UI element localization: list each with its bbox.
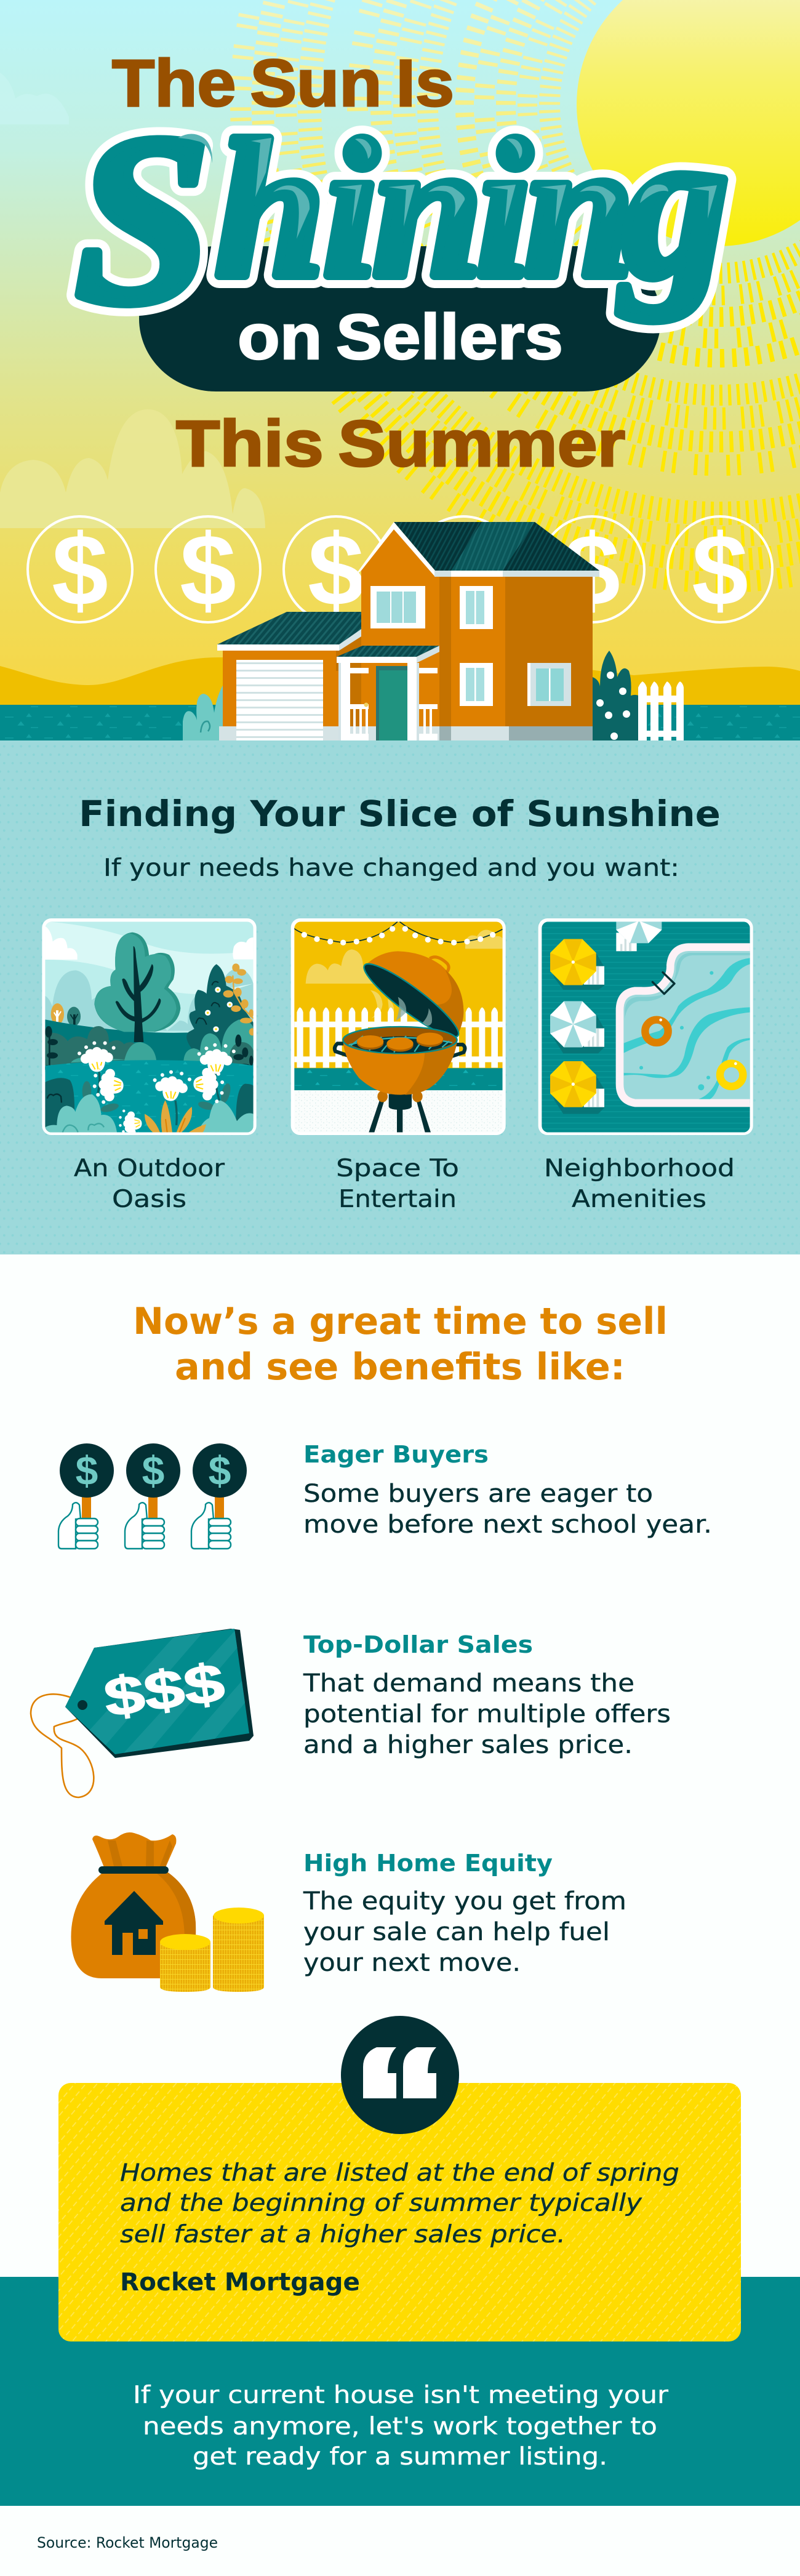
sun xyxy=(577,0,800,246)
waves xyxy=(624,958,750,1099)
house xyxy=(183,522,684,740)
title: Shining: g xyxy=(616,86,729,321)
card labels: Amenities xyxy=(572,1186,706,1213)
title: Shining: i xyxy=(323,100,378,318)
main body xyxy=(361,569,439,726)
quote attribution: Rocket Mortgage xyxy=(120,2268,360,2297)
title: Shining: n xyxy=(524,100,634,318)
dollar coins: $ xyxy=(435,513,492,627)
title: Shining: i xyxy=(476,100,532,318)
smoke xyxy=(370,990,394,1018)
porch rails and columns xyxy=(338,663,438,740)
text: top-dollar sales: potential for multiple offers xyxy=(303,1700,671,1728)
text: high home equity: The equity you get from xyxy=(303,1887,626,1916)
highlights xyxy=(178,134,717,239)
sky background xyxy=(0,0,800,740)
card: neighborhood amenities xyxy=(538,918,754,1135)
water strip xyxy=(0,705,800,740)
panel: closing band xyxy=(0,2277,800,2506)
text: top-dollar sales: That demand means the xyxy=(303,1669,634,1698)
heading: benefits xyxy=(133,1300,668,1389)
text: high home equity xyxy=(303,1850,626,1977)
small trees xyxy=(51,1003,64,1025)
flowers xyxy=(78,1041,116,1072)
title: Shining: h xyxy=(215,100,325,318)
water xyxy=(294,1068,503,1090)
card labels: An Outdoor xyxy=(74,1155,225,1182)
card labels xyxy=(74,1155,735,1213)
fence xyxy=(638,681,684,740)
title: This Summer: This Summer xyxy=(176,407,625,480)
text: eager buyers: move before next school year. xyxy=(303,1511,712,1539)
card labels: Entertain xyxy=(338,1186,457,1213)
heading: Finding Your Slice of Sunshine xyxy=(79,793,721,835)
lid handle xyxy=(430,957,449,972)
dollar coins: $ xyxy=(52,513,108,627)
text: eager buyers: Eager Buyers xyxy=(303,1441,489,1468)
title: Shining: h xyxy=(215,100,325,318)
ladder xyxy=(652,973,674,994)
water xyxy=(45,1060,254,1133)
icon: price tag: $$$ xyxy=(100,1651,228,1728)
card labels: Neighborhood xyxy=(544,1155,735,1182)
heading: benefits: Now’s a great time to sell xyxy=(133,1300,668,1343)
text: high home equity: your sale can help fuel xyxy=(303,1918,610,1946)
hills xyxy=(0,657,800,705)
title: Shining: n xyxy=(373,100,482,318)
orange leaves xyxy=(145,1100,206,1133)
title: Shining: S xyxy=(75,85,210,354)
dark bush xyxy=(186,964,254,1059)
grill handles xyxy=(335,1043,465,1056)
steam on lid xyxy=(396,997,432,1025)
swim rings xyxy=(645,1020,668,1043)
fence xyxy=(294,1007,503,1068)
dollar coins: $ xyxy=(564,513,620,627)
source: Source: Rocket Mortgage xyxy=(37,2534,218,2551)
sun rays xyxy=(241,0,800,582)
garage xyxy=(223,650,361,727)
bowl xyxy=(343,1040,457,1095)
dollar coins: $ xyxy=(308,513,364,627)
dollar coins xyxy=(28,513,772,627)
card labels: Oasis xyxy=(112,1186,186,1213)
title: Shining: S xyxy=(75,85,210,354)
flower stems xyxy=(97,1072,220,1125)
title: Shining: i xyxy=(476,100,532,318)
text: top-dollar sales: and a higher sales price. xyxy=(303,1731,633,1759)
closing text xyxy=(133,2381,669,2471)
ground xyxy=(45,1019,254,1072)
small faint cloud xyxy=(0,73,69,124)
closing text: needs anymore, let's work together to xyxy=(143,2413,657,2441)
callout: quote xyxy=(58,2016,741,2341)
dollar coins: $ xyxy=(180,513,236,627)
foundation xyxy=(361,726,439,740)
door xyxy=(376,666,407,740)
subtitle: on Sellers: on Sellers xyxy=(238,302,563,373)
icon: quote mark xyxy=(341,2016,459,2134)
icon: buyer signs: $ xyxy=(142,1448,164,1493)
icon: buyer signs: $ xyxy=(209,1448,231,1493)
windows xyxy=(370,586,425,628)
lid xyxy=(366,951,463,1036)
quote text xyxy=(120,2159,679,2249)
title: Shining xyxy=(75,85,729,354)
title: Shining: n xyxy=(373,100,482,318)
panel: finding your slice of sunshine xyxy=(0,740,800,1254)
cloud xyxy=(0,409,265,528)
card labels: Space To xyxy=(336,1155,459,1182)
icon: buyer signs: $ xyxy=(76,1448,98,1493)
icon: money bag xyxy=(71,1832,264,1992)
closing text: get ready for a summer listing. xyxy=(193,2443,607,2471)
quote text: sell faster at a higher sales price. xyxy=(120,2221,566,2249)
orange branch xyxy=(233,976,254,1019)
card: space to entertain xyxy=(291,918,506,1135)
title: Shining: n xyxy=(524,100,634,318)
text: top-dollar sales: Top-Dollar Sales xyxy=(303,1631,533,1658)
icon: price tag xyxy=(31,1625,258,1797)
quote text: and the beginning of summer typically xyxy=(120,2189,642,2217)
right dark leaves xyxy=(230,1042,254,1065)
dollar coins: $ xyxy=(692,513,748,627)
house glyph xyxy=(105,1891,163,1955)
coin stacks xyxy=(160,1942,210,1992)
text: eager buyers: Some buyers are eager to xyxy=(303,1480,653,1508)
main roof xyxy=(394,522,599,571)
patties xyxy=(357,1033,443,1052)
left bushes xyxy=(45,1026,134,1066)
text: eager buyers xyxy=(303,1441,712,1539)
string lights xyxy=(294,921,503,945)
bottom bushes xyxy=(45,1078,77,1133)
left bush xyxy=(183,683,224,740)
pool xyxy=(620,947,754,1103)
text: high home equity: your next move. xyxy=(303,1949,521,1977)
heading: benefits: and see benefits like: xyxy=(175,1346,625,1389)
loungers xyxy=(584,966,604,985)
pill: on Sellers background xyxy=(139,246,661,391)
card: outdoor oasis xyxy=(42,918,257,1138)
panel: hero xyxy=(0,0,800,740)
title: The Sun Is: The Sun Is xyxy=(112,46,454,120)
top umbrella xyxy=(616,933,637,951)
umbrella shadows xyxy=(553,953,604,1114)
tree xyxy=(94,933,180,1032)
title: Shining: g xyxy=(616,86,729,321)
closing text: If your current house isn't meeting your xyxy=(133,2381,669,2409)
text: high home equity: High Home Equity xyxy=(303,1850,553,1877)
sky clouds xyxy=(306,949,374,984)
text: top-dollar sales xyxy=(303,1631,671,1759)
subheading: If your needs have changed and you want: xyxy=(103,854,679,882)
clouds xyxy=(45,926,78,960)
title: Shining: i xyxy=(323,100,378,318)
grill legs xyxy=(369,1101,431,1133)
porch xyxy=(350,663,439,726)
umbrellas xyxy=(550,939,596,985)
mounds xyxy=(124,1042,156,1062)
icon: buyer signs xyxy=(58,1443,247,1549)
right bush xyxy=(593,651,645,740)
ground xyxy=(294,1090,503,1133)
quote text: Homes that are listed at the end of spring xyxy=(120,2159,679,2187)
